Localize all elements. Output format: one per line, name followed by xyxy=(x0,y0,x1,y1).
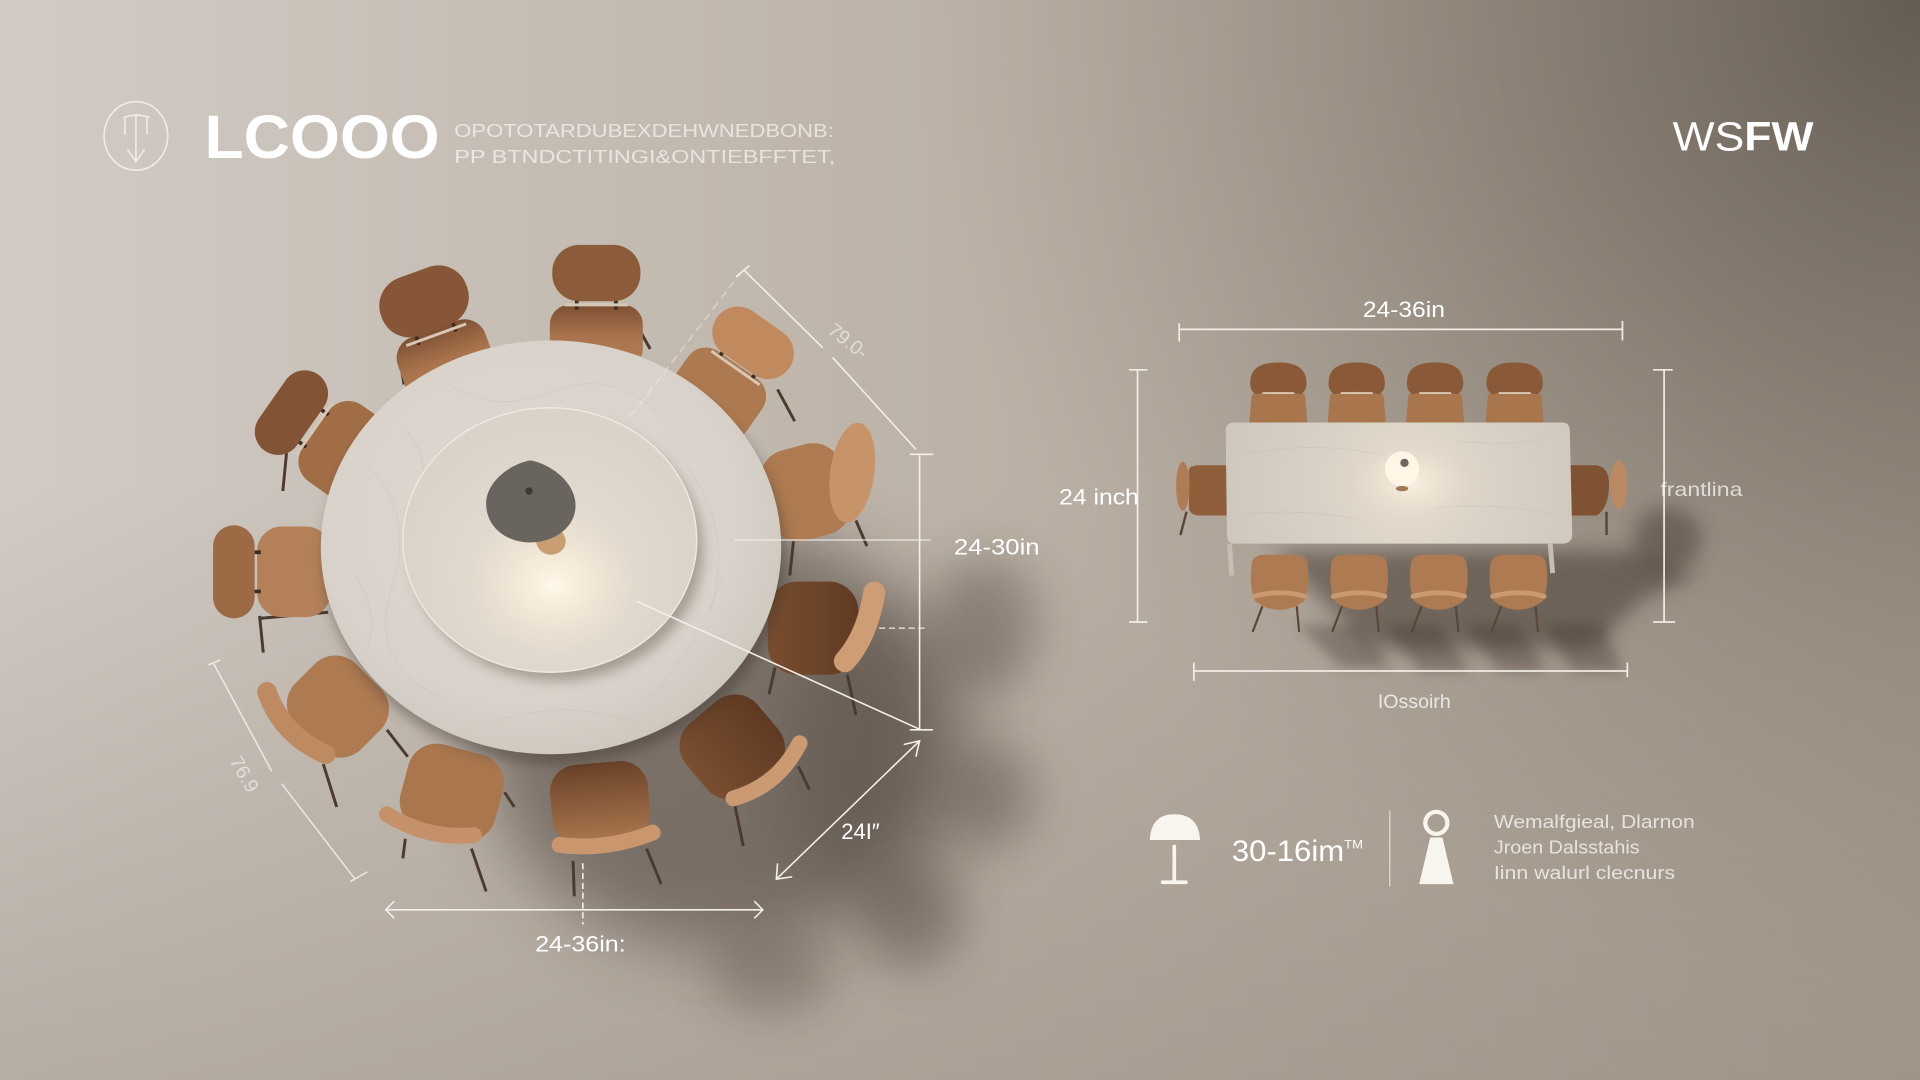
chair 8 xyxy=(667,682,800,812)
description text: Wemalfgieal, Dlarnon xyxy=(1494,811,1695,832)
label: 79.0: 79.0- xyxy=(823,319,872,364)
round table with eleven chairs xyxy=(213,245,881,896)
bottom chair 2 xyxy=(1330,555,1388,632)
vertical dimension xyxy=(910,454,933,730)
divider xyxy=(1389,811,1390,887)
top right diagonal xyxy=(736,266,916,449)
chair 9 xyxy=(768,582,874,675)
label: 24 in: 24I″ xyxy=(841,819,880,844)
table legs xyxy=(1229,544,1553,576)
lower left diagonal xyxy=(208,660,367,882)
label: 24-36in bottom: 24-36in: xyxy=(535,931,626,956)
table lamp cap xyxy=(1400,459,1409,467)
chair 3 xyxy=(246,361,400,508)
long diagonal leader xyxy=(637,601,921,730)
chair 11 xyxy=(660,296,805,449)
chair legs xyxy=(260,329,867,896)
chair 10 xyxy=(753,420,881,548)
table top xyxy=(321,340,781,754)
rectangular table with ten chairs xyxy=(1176,362,1627,632)
lamp stem xyxy=(536,528,566,555)
inner disk shadow xyxy=(411,419,703,681)
tagline: PP BTNDCTITINGI&ONTIEBFFTET, xyxy=(454,146,835,167)
table lamp base xyxy=(1396,486,1408,491)
label: 24-36in top: 24-36in xyxy=(1363,297,1445,322)
tagline xyxy=(454,120,835,167)
dashed tick xyxy=(879,627,928,629)
bottom arrow xyxy=(386,901,763,918)
bottom chair 3 xyxy=(1410,555,1468,632)
label: IOssoirh: IOssoirh xyxy=(1378,691,1451,713)
marble veins xyxy=(1243,438,1555,519)
logo emblem xyxy=(104,102,168,170)
left dimension xyxy=(1129,370,1147,622)
inner disk xyxy=(403,408,697,672)
right dimension xyxy=(1653,370,1675,622)
lamp tip xyxy=(525,487,533,495)
lamp height value: TM xyxy=(1344,838,1363,852)
top chair 1 xyxy=(1249,362,1308,427)
lamp shade xyxy=(486,460,576,542)
tagline: OPOTOTARDUBEXDEHWNEDBONB: xyxy=(454,120,834,141)
table lamp xyxy=(1385,451,1419,487)
icon: table lamp xyxy=(1150,814,1200,884)
description text: Iinn walurl clecnurs xyxy=(1494,862,1675,883)
table lamp glow xyxy=(1349,443,1472,522)
chair 1 xyxy=(550,245,643,369)
top chair 2 xyxy=(1327,362,1386,427)
right chair xyxy=(1570,460,1627,535)
chair 4 xyxy=(213,525,331,618)
logo wordmark: LCOOO xyxy=(204,103,440,171)
rectangular table shadow xyxy=(1273,507,1702,671)
corner arrow xyxy=(776,741,920,879)
top chair 3 xyxy=(1406,362,1464,427)
chair 2 xyxy=(370,257,501,408)
bottom dashed drop xyxy=(582,863,584,924)
chair 6 xyxy=(387,737,511,848)
bottom dimension xyxy=(1194,662,1627,681)
lamp glow xyxy=(465,514,642,656)
faint dashed radial line xyxy=(631,274,740,416)
lamp height value: 30-16im xyxy=(1232,835,1338,868)
description text: Jroen Dalsstahis xyxy=(1494,836,1640,857)
brand mark: WSFW xyxy=(1673,114,1814,160)
label: 76.9: 76.9 xyxy=(225,753,263,797)
label: 24 inch: 24 inch xyxy=(1059,484,1139,509)
marble veins xyxy=(355,380,722,722)
dimension lines: round table xyxy=(208,266,933,924)
dimension lines: rectangular table xyxy=(1129,321,1675,681)
chair 5 xyxy=(267,643,401,770)
bottom chair 4 xyxy=(1490,555,1547,632)
description text xyxy=(1494,811,1695,883)
horizontal leader xyxy=(735,539,931,541)
label: frantlina: frantlina xyxy=(1660,479,1743,501)
left chair xyxy=(1176,462,1227,535)
label: 24-30in: 24-30in xyxy=(954,535,1040,560)
table top xyxy=(1226,422,1572,544)
top dimension xyxy=(1179,321,1622,342)
icon: clearance marker xyxy=(1419,812,1453,884)
top chair 4 xyxy=(1485,362,1544,427)
round table floor shadow xyxy=(484,520,1037,1015)
chair 7 xyxy=(548,759,653,846)
bottom chair 1 xyxy=(1251,555,1308,632)
table shadow contact xyxy=(323,353,786,764)
